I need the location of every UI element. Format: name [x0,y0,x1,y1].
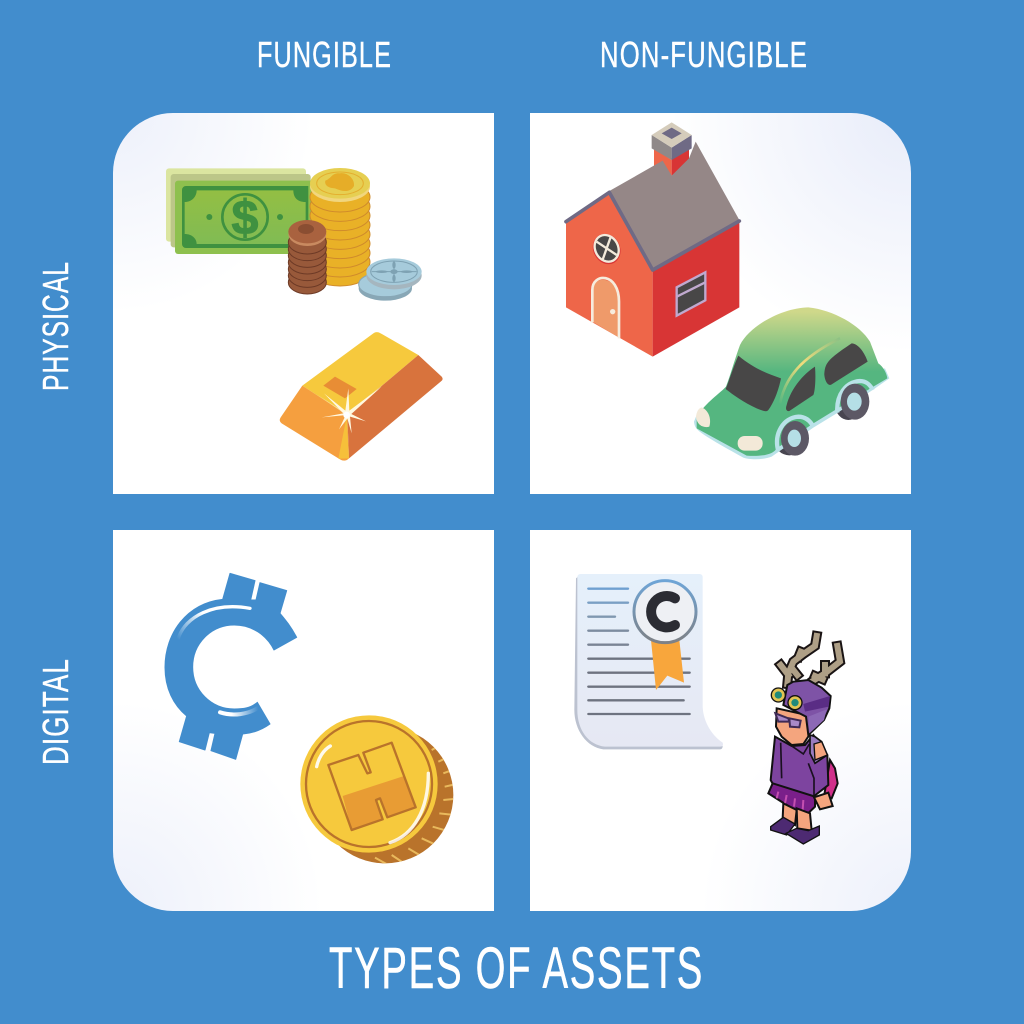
panel: digital non-fungible [530,530,911,911]
icon: copyright document [574,574,723,749]
icon: cash and coins [166,168,422,301]
row heading: physical: PHYSICAL [35,261,76,391]
icon: house [566,122,739,357]
column heading: non-fungible: NON-FUNGIBLE [600,34,808,75]
icon: blue C token [165,573,297,759]
panel: physical fungible [113,113,494,494]
icon: pixel avatar [768,636,840,844]
row heading: digital: DIGITAL [35,658,76,765]
panel: physical non-fungible [530,113,911,494]
icon: gold bar [280,332,443,461]
icon: gold coin [300,715,457,865]
panel: digital fungible [113,530,494,911]
icon: cash and coins: $ [232,191,259,245]
icon: car [694,307,889,459]
title: TYPES OF ASSETS [329,936,704,1001]
column heading: fungible: FUNGIBLE [257,34,392,75]
